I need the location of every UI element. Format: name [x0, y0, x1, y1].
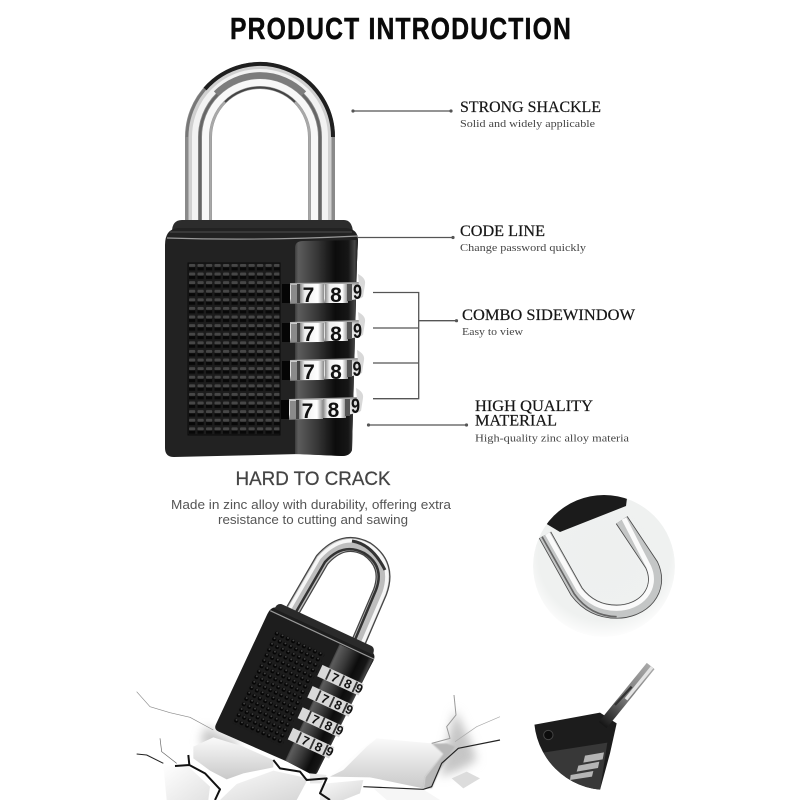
raised shackle leg	[603, 666, 652, 725]
lock body	[165, 220, 358, 457]
dial row 3: 9	[352, 358, 362, 381]
dial row 4: 9	[351, 395, 360, 418]
dial row 3: 8	[330, 361, 342, 384]
dial row 1: 7	[303, 284, 314, 307]
tilted dial row 1: 7	[329, 670, 341, 686]
title: PRODUCT INTRODUCTION	[230, 11, 572, 46]
tilted dial row 3: 8	[322, 718, 334, 734]
tilted body	[214, 600, 381, 779]
tilted dial row 1	[317, 664, 365, 697]
tilted dial row 3	[297, 706, 346, 739]
dial row 1: 9	[353, 281, 362, 304]
callout: high quality material: HIGH QUALITY	[475, 398, 593, 415]
tilted dial row 3: 9	[333, 723, 346, 738]
tilted dial row 3: 7	[309, 712, 321, 728]
dial row 4: 7	[302, 400, 313, 423]
tilted dial row 4: 7	[299, 733, 312, 749]
heading: hard to crack: HARD TO CRACK	[236, 468, 390, 490]
dial row 2	[282, 312, 365, 346]
callout: strong shackle: STRONG SHACKLE	[460, 99, 601, 116]
tilted dial row 4: 8	[312, 739, 325, 755]
cracked ground slabs	[137, 692, 500, 800]
combination dials	[281, 274, 365, 423]
tilted dial row 2: 7	[319, 691, 331, 707]
tilted dial row 1: 8	[342, 676, 354, 692]
callout: combo sidewindow	[373, 292, 635, 399]
callout: code line: CODE LINE	[460, 223, 545, 240]
dial row 4: 8	[328, 399, 340, 422]
tilted dial row 4: 9	[323, 744, 336, 760]
tilted shackle	[290, 541, 387, 649]
tilted dial row 2	[307, 685, 355, 718]
description text: Made in zinc alloy with durability, offering extra	[171, 497, 452, 512]
callout: strong shackle	[351, 99, 601, 130]
callout: combo sidewindow: COMBO SIDEWINDOW	[462, 307, 635, 324]
dial row 4	[281, 388, 363, 423]
detail photo: open shackle	[530, 666, 652, 790]
shackle	[187, 64, 333, 226]
dial row 3: 7	[303, 361, 315, 384]
crack lines	[137, 692, 500, 800]
cracked ground background shading	[200, 710, 477, 777]
callout: high quality material	[367, 398, 629, 444]
dial row 1	[282, 274, 365, 307]
dial row 2: 7	[303, 323, 315, 346]
tilted dial row 4	[287, 727, 336, 760]
tilted dial row 2: 8	[332, 698, 344, 713]
dial row 3	[282, 350, 364, 384]
description text	[171, 497, 452, 527]
callout: high quality material: MATERIAL	[475, 412, 557, 430]
tilted dial row 2: 9	[343, 702, 355, 718]
detail photo: shackle close-up	[533, 495, 675, 630]
tilted padlock	[214, 541, 387, 779]
callout: code line: Change password quickly	[460, 242, 587, 254]
dial row 1: 8	[330, 284, 342, 307]
dial row 2: 9	[353, 320, 362, 343]
callout: strong shackle: Solid and widely applicable	[460, 118, 595, 130]
callout: code line	[358, 223, 587, 254]
callout: combo sidewindow: Easy to view	[462, 326, 523, 338]
description text: resistance to cutting and sawing	[218, 512, 408, 527]
callout: high quality material: High-quality zinc alloy materia	[475, 432, 629, 444]
main padlock	[165, 64, 365, 457]
dial row 2: 8	[330, 323, 342, 346]
tilted dial row 1: 9	[353, 681, 365, 697]
